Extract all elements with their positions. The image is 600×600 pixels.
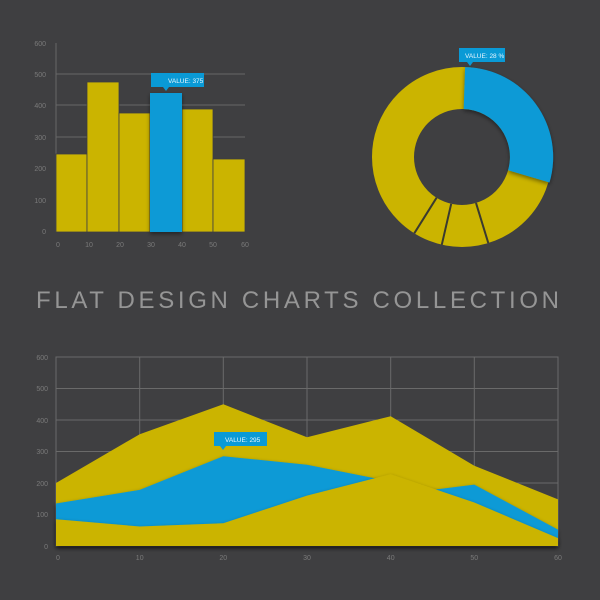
bar chart y-axis labels: 500: [34, 72, 46, 79]
bar chart x-axis labels: 50: [209, 242, 217, 249]
bar chart x-axis labels: 60: [241, 242, 249, 249]
area chart y-axis labels: 600: [36, 355, 48, 362]
bar chart y-axis labels: 400: [34, 103, 46, 110]
bar chart x-axis labels: 40: [178, 242, 186, 249]
callout: value 295: [214, 432, 267, 450]
area chart x-axis labels: 0: [56, 555, 60, 562]
bar chart x-axis labels: 30: [147, 242, 155, 249]
bar chart y-axis labels: 200: [34, 166, 46, 173]
highlighted bar: [150, 93, 182, 232]
area: blue series: [56, 456, 558, 546]
area chart x-axis labels: 20: [219, 555, 227, 562]
bar chart y-axis labels: 100: [34, 198, 46, 205]
area chart x-axis labels: 40: [387, 555, 395, 562]
area chart y-axis labels: 400: [36, 418, 48, 425]
area chart y-axis labels: 200: [36, 481, 48, 488]
bars: [56, 82, 245, 232]
area: top yellow series: [56, 404, 558, 546]
area chart y-axis labels: 0: [44, 544, 48, 551]
bar chart y-axis labels: 300: [34, 135, 46, 142]
callout: value 375: VALUE: 375: [168, 78, 204, 85]
area chart y-axis labels: 100: [36, 512, 48, 519]
bar chart x-axis labels: 20: [116, 242, 124, 249]
area chart x-axis labels: 60: [554, 555, 562, 562]
area chart x-axis labels: [56, 555, 562, 562]
callout: value 28%: VALUE: 28 %: [465, 53, 504, 60]
bar chart x-axis labels: 0: [56, 242, 60, 249]
area chart x-axis labels: 10: [136, 555, 144, 562]
area chart y-axis labels: 300: [36, 449, 48, 456]
callout: value 295: VALUE: 295: [225, 437, 261, 444]
bar chart x-axis labels: 10: [85, 242, 93, 249]
callout: value 375: [151, 73, 204, 91]
area chart x-axis labels: 50: [470, 555, 478, 562]
bar chart x-axis labels: [56, 242, 249, 249]
title: FLAT DESIGN CHARTS COLLECTION: [36, 287, 559, 314]
donut blue segment: [464, 67, 553, 182]
area chart y-axis labels: 500: [36, 386, 48, 393]
area chart x-axis labels: 30: [303, 555, 311, 562]
donut chart: [393, 48, 553, 245]
callout: value 28%: [459, 48, 505, 66]
bar chart: [34, 41, 249, 249]
bar chart y-axis labels: [34, 41, 46, 236]
area: bottom yellow series: [56, 474, 558, 546]
dividers: [414, 198, 488, 245]
bar chart y-axis labels: 600: [34, 41, 46, 48]
bar chart y-axis labels: 0: [42, 229, 46, 236]
area chart: [36, 355, 562, 562]
area chart y-axis labels: [36, 355, 48, 551]
